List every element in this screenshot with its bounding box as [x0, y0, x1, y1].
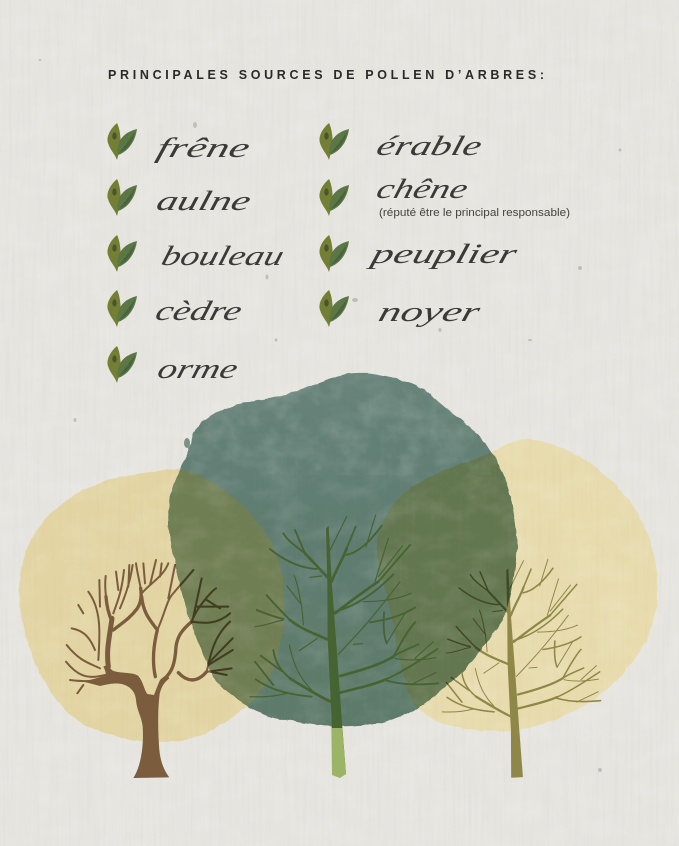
- item: érable: [319, 123, 485, 162]
- item: cèdre: cèdre: [152, 296, 245, 327]
- item: orme: [107, 346, 241, 385]
- item: aulne: [107, 179, 254, 217]
- blob: central green: [168, 373, 517, 727]
- item: chêne: (réputé être le principal responsable): [379, 207, 570, 219]
- tree: right olive: [442, 559, 600, 778]
- blob mottling: [190, 374, 496, 476]
- item: bouleau: bouleau: [158, 241, 287, 272]
- item: bouleau: [107, 235, 287, 272]
- item: chêne: [319, 174, 570, 219]
- item: noyer: noyer: [375, 297, 485, 328]
- title: PRINCIPALES SOURCES DE POLLEN D’ARBRES:: [108, 68, 544, 82]
- tree: left brown: [66, 560, 233, 778]
- blob overlap: left olive: [168, 468, 285, 706]
- item: frêne: [107, 123, 253, 164]
- blob: right yellow: [377, 440, 658, 731]
- item: peuplier: [319, 235, 522, 272]
- watercolor blobs: [20, 365, 658, 742]
- item: chêne: chêne: [373, 174, 471, 205]
- list: right column: [319, 123, 570, 328]
- item: érable: érable: [373, 131, 485, 162]
- item: noyer: [319, 290, 485, 328]
- item: peuplier: peuplier: [365, 239, 522, 270]
- blob overlap: right olive: [376, 452, 518, 709]
- item: orme: orme: [154, 354, 241, 385]
- list: left column: [107, 123, 287, 385]
- paint drip: [184, 438, 190, 448]
- item: cèdre: [107, 290, 245, 327]
- blob: left yellow: [20, 469, 284, 742]
- item: aulne: aulne: [153, 186, 254, 217]
- item: frêne: frêne: [153, 133, 253, 164]
- tree: middle green: [250, 515, 438, 778]
